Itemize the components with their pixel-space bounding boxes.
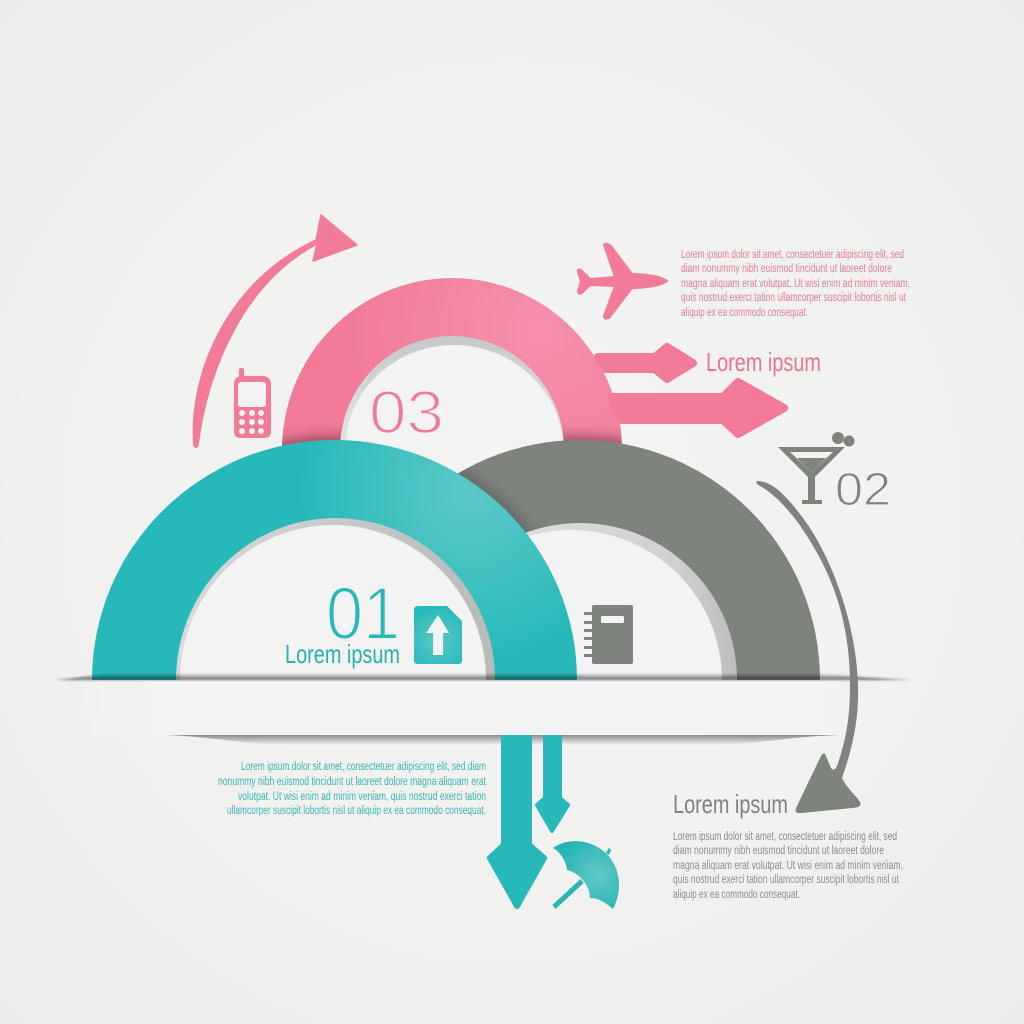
text block: pink: Lorem ipsum dolor sit amet, consectetuer adipiscing elit, sed	[681, 249, 904, 261]
heading: teal Lorem ipsum: Lorem ipsum	[285, 639, 400, 669]
number 01: 01	[326, 572, 400, 655]
arc 03: pink	[282, 278, 622, 450]
icon: notebook	[584, 605, 633, 664]
text block: pink	[681, 249, 910, 319]
text block: gray: aliquip ex ea commodo consequat.	[673, 889, 800, 901]
text block: teal: nonummy nibh euismod tincidunt ut laoreet dolore magna aliquam erat	[218, 776, 487, 788]
arc 01: teal	[92, 440, 577, 680]
heading: pink Lorem ipsum: Lorem ipsum	[706, 347, 821, 377]
text block: teal	[218, 761, 487, 817]
number 03: 03	[369, 379, 444, 446]
shadow cast on gray arc	[458, 468, 534, 532]
number 02: 02	[835, 463, 891, 515]
teal arrows below band	[490, 735, 568, 906]
pink arrows out of arc 03	[598, 347, 784, 434]
curved arrow: gray	[756, 481, 861, 813]
arc 02: gray	[340, 440, 820, 680]
text block: gray: Lorem ipsum dolor sit amet, consectetuer adipiscing elit, sed	[673, 831, 897, 843]
text block: gray: quis nostrud exerci tation ullamcorper suscipit lobortis nisl ut	[673, 874, 900, 886]
infographic	[58, 214, 910, 909]
text block: pink: aliquip ex ea commodo consequat.	[681, 307, 808, 319]
text block: teal: Lorem ipsum dolor sit amet, consectetuer adipiscing elit, sed diam	[241, 761, 486, 773]
heading: gray Lorem ipsum: Lorem ipsum	[673, 789, 788, 819]
paper band with shadows	[55, 673, 912, 745]
text block: teal: volutpat. Ut wisi enim ad minim veniam, quis nostrud exerci tation	[238, 791, 486, 803]
text block: gray: diam nonummy nibh euismod tincidunt ut laoreet dolore	[673, 845, 884, 857]
text block: gray	[673, 831, 903, 901]
curved arrow: pink	[193, 215, 357, 447]
text block: teal: ullamcorper suscipit lobortis nisl ut aliquip ex ea commodo consequat.	[227, 805, 486, 817]
icon: mobile phone	[234, 368, 271, 438]
text block: pink: diam nonummy nibh euismod tincidunt ut laoreet dolore	[681, 263, 892, 275]
shadow cast on pink arc	[282, 428, 622, 446]
text block: gray: magna aliquam erat volutpat. Ut wisi enim ad minim veniam,	[673, 860, 903, 872]
icon: umbrella	[553, 841, 619, 909]
icon: cocktail glass	[778, 432, 854, 504]
text block: pink: quis nostrud exerci tation ullamcorper suscipit lobortis nisl ut	[681, 292, 907, 304]
icon: upload document	[414, 606, 462, 664]
icon: airplane	[578, 244, 667, 319]
text block: pink: magna aliquam erat volutpat. Ut wisi enim ad minim veniam,	[681, 278, 910, 290]
